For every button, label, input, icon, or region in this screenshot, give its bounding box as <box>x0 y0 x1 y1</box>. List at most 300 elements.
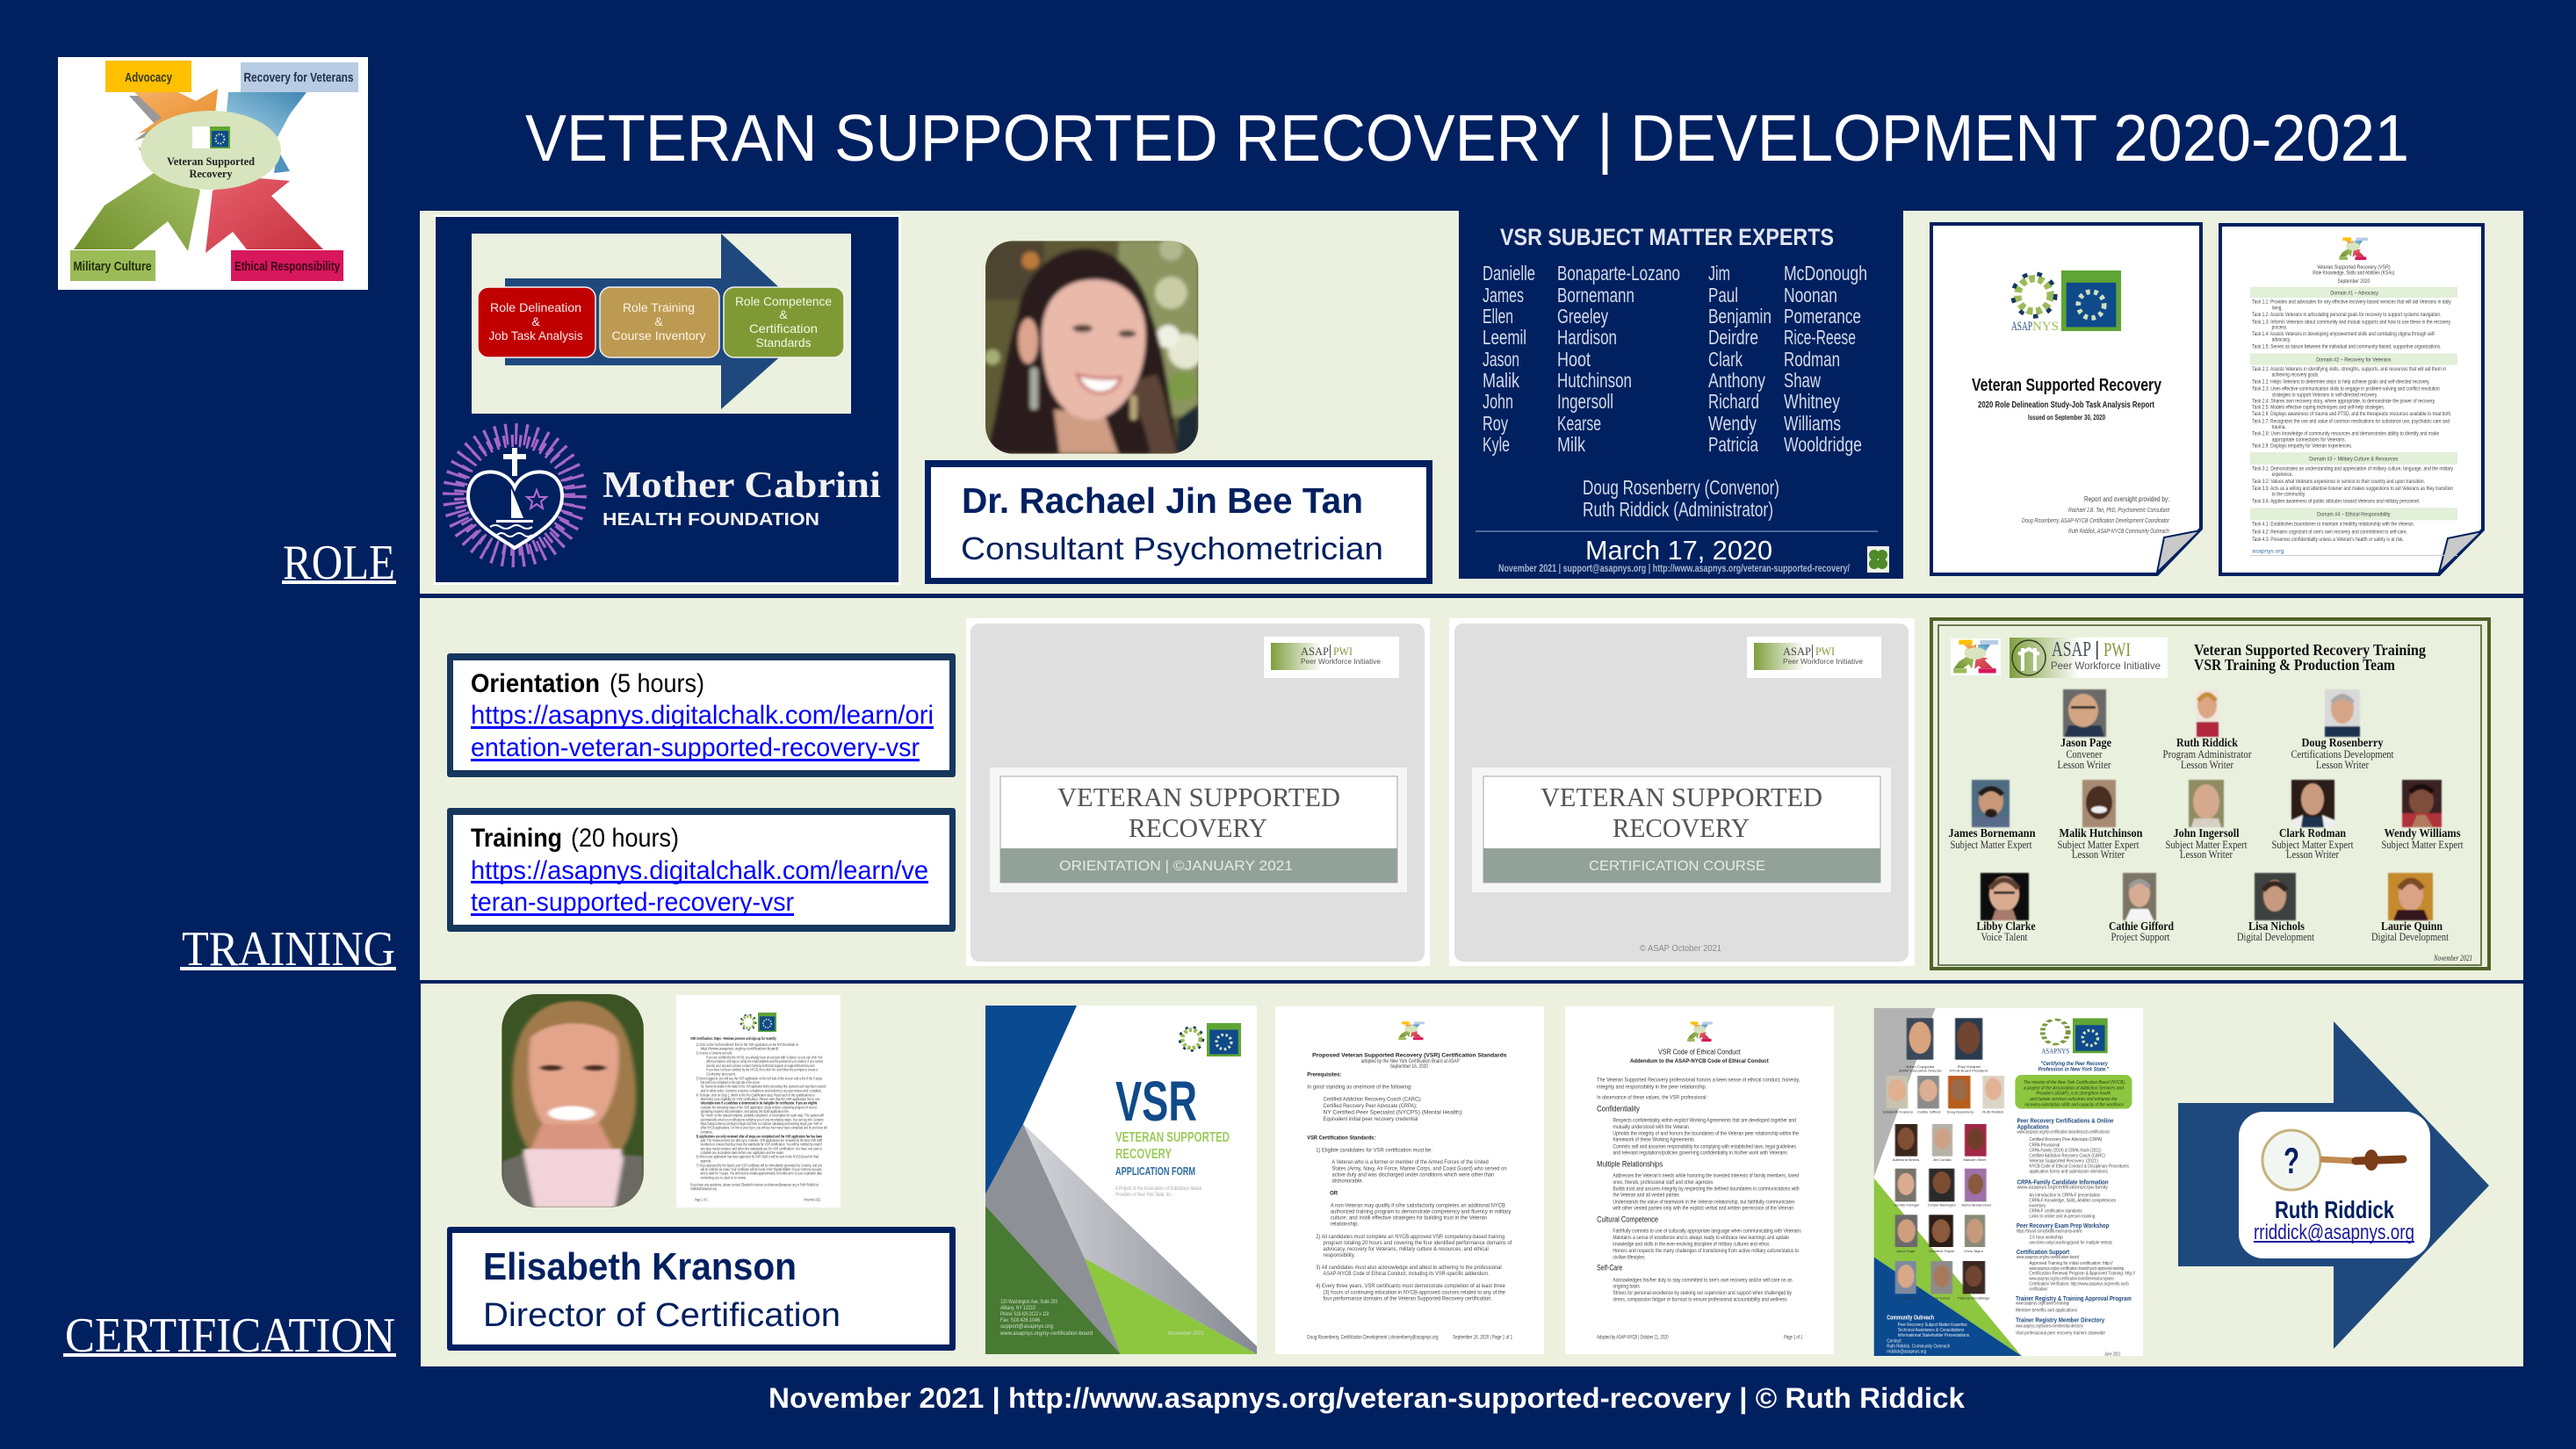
document: NY Certification Board brochure: Doug Rosenberry <box>1947 1111 1973 1114</box>
document: role knowledge, skills and abilities: appropriate connections for Veterans. <box>2272 436 2346 443</box>
team member names and roles: Subject Matter Expert <box>2166 839 2248 851</box>
logo: VSR domains: Military Culture <box>74 259 151 274</box>
slide: training and production team: PWI <box>2103 638 2131 660</box>
document: NY Certification Board brochure: Malcolm Steel <box>1964 1158 1986 1162</box>
document: job task analysis report cover: Issued on September 30, 2020 <box>2028 413 2105 422</box>
document: certification steps: 2) Access a Certemy account: <box>696 1050 732 1056</box>
panel: certification: advocacy, recovery for Veterans, military culture & resources, and ethical <box>1324 1245 1489 1252</box>
document: NY Certification Board brochure: Community Outreach <box>1887 1314 1934 1321</box>
document: job task analysis report cover: Report and oversight provided by: <box>2084 495 2169 503</box>
slide: orientation course title: Peer Workforce Initiative <box>1301 658 1382 666</box>
panel: certification: and relevant regulations/policies governing confidentiality in his/her work with Veterans <box>1613 1150 1787 1156</box>
document: NY Certification Board brochure: 2.5 hour workshop <box>2029 1235 2063 1240</box>
slide: orientation course title: PWI <box>1333 645 1353 658</box>
document: code of ethical conduct: Cultural Competence <box>1597 1215 1658 1224</box>
role process and Mother Cabrini card: Course Inventory <box>611 328 706 342</box>
document: VSR application form cover: VSR <box>1115 1070 1197 1133</box>
link card: orientation <box>447 653 956 777</box>
document: certification steps: reminding you to start or to renew. <box>701 1175 747 1179</box>
document: VSR application form cover: 120 Washington Ave, Suite 203 <box>1000 1300 1058 1305</box>
document: NY Certification Board brochure: Member benefits and applications <box>2016 1308 2077 1313</box>
document: certification standards <box>1275 1006 1544 1354</box>
panel: certification: access your account, please contact Certemy technical support at support@certemy.com <box>706 1063 815 1068</box>
document: NY Certification Board brochure: Links to online and in-person training <box>2029 1214 2095 1219</box>
panel: VSR subject matter experts: Deirdre <box>1708 326 1758 349</box>
panel: VSR subject matter experts: November 2021 | support@asapnys.org | http://www.asapnys.org/veteran-supported-recovery/ <box>1498 562 1850 574</box>
document: NY Certification Board brochure: Applications <box>2017 1123 2049 1130</box>
panel: certification: Acknowledges his/her duty to stay committed to one's own recovery and/or self-care on an <box>1613 1277 1793 1283</box>
title: VETERAN SUPPORTED RECOVERY | DEVELOPMENT 2020-2021 <box>525 101 2409 175</box>
panel: VSR subject matter experts: Noonan <box>1784 284 1837 306</box>
document: certification standards: Certified Recovery Peer Advocate (CRPA); <box>1324 1102 1418 1109</box>
section label: training: TRAINING <box>182 922 395 977</box>
panel: certification: 3) All candidates must also acknowledge and attest to adhering to the professional <box>1316 1264 1502 1271</box>
panel: certification: Certification Renewal Program & Approved Training: http:// <box>2029 1271 2135 1276</box>
document: NY Certification Board brochure: CRPA-Family Candidate Information <box>2017 1179 2109 1186</box>
document: role knowledge, skills and abilities: strategies to support Veterans in self-directed recovery. <box>2272 393 2378 398</box>
panel: VSR subject matter experts: Patricia <box>1708 433 1758 456</box>
team member names and roles: Project Support <box>2111 931 2170 943</box>
panel: VSR subject matter experts: James <box>1483 284 1524 306</box>
document: VSR application form cover: A Project of the Association of Substance Abuse <box>1115 1186 1202 1192</box>
section label: certification: CERTIFICATION <box>65 1308 395 1363</box>
document: job task analysis report cover: Doug Rosenberry, ASAP-NYCB Certification Development Coordinator <box>2022 518 2170 524</box>
document: NY Certification Board brochure: www.asapnys.org/certifications/crpa-family <box>2017 1185 2108 1190</box>
document: NY Certification Board brochure: CRPA-F certification standards <box>2029 1208 2082 1214</box>
panel: certification: Upholds the integrity of and honors the boundaries of the Veteran peer relationship within the <box>1613 1130 1799 1136</box>
team member names and roles <box>1948 737 2472 962</box>
panel: certification: uploading required documentation, and paying the $100 application fee. <box>701 1109 790 1114</box>
panel: certification: Strives for personal excellence by seeking out supervision and support when challenged by <box>1613 1290 1792 1296</box>
panel: certification: States (Army, Navy, Air Force, Marine Corps, and Coast Guard) who served on <box>1331 1165 1507 1171</box>
document: role knowledge, skills and abilities: trauma. <box>2272 424 2286 430</box>
panel: VSR subject matter experts <box>1459 211 1903 579</box>
document: code of ethical conduct: Adopted by ASAP-NYCB | October 21, 2020 <box>1597 1334 1669 1340</box>
role process and Mother Cabrini card: HEALTH FOUNDATION <box>603 510 819 530</box>
document: role knowledge, skills and abilities: experience. <box>2272 472 2293 478</box>
document: certification standards: Doug Rosenberry, Certification Development | drosenberry@asapnys.org <box>1307 1334 1439 1340</box>
document: certification steps: http://www.asapnys.org/ny-certification-board/ <box>701 1046 779 1051</box>
panel: certification: If you have any questions, please contact Elisabeth Kranson at ekranson@asapnys.org or Ruth Riddick at <box>690 1182 819 1186</box>
role process and Mother Cabrini card: & <box>531 314 540 328</box>
team member names and roles: Malik Hutchinson <box>2059 827 2143 840</box>
logo: VSR domains: Ethical Responsibility <box>235 259 340 274</box>
document: role knowledge, skills and abilities: Domain #1 – Advocacy <box>2330 290 2378 296</box>
link card: orientation: entation-veteran-supported-recovery-vsr <box>471 733 920 762</box>
link card: training: https://asapnys.digitalchalk.com/learn/ve <box>471 856 928 885</box>
panel: VSR subject matter experts: Malik <box>1483 369 1519 392</box>
panel: VSR subject matter experts: Hardison <box>1557 326 1617 349</box>
panel: VSR subject matter experts: Whitney <box>1784 390 1840 413</box>
document: code of ethical conduct <box>1565 1006 1834 1354</box>
name card: Rachael Tan <box>925 460 1432 584</box>
link card: training: teran-supported-recovery-vsr <box>471 888 794 917</box>
logo: VSR domains <box>58 57 368 290</box>
panel: VSR subject matter experts: Wendy <box>1708 412 1757 435</box>
footer: November 2021 | http://www.asapnys.org/veteran-supported-recovery | © Ruth Riddick <box>768 1382 1965 1414</box>
photo: Elisabeth Kranson <box>501 994 644 1208</box>
document: NY Certification Board brochure: https://tinyurl.com/y5kdfk.exam-prep-online <box>2017 1229 2082 1234</box>
document: NY Certification Board brochure: An introduction to CRPA-F presentation <box>2029 1193 2100 1198</box>
panel: VSR subject matter experts: McDonough <box>1784 262 1867 285</box>
role process and Mother Cabrini card: Role Delineation <box>490 300 581 314</box>
panel: training <box>420 598 2523 980</box>
team member photos <box>1972 689 2442 920</box>
document: role knowledge, skills and abilities: Domain #3 – Military Culture & Resources <box>2309 457 2399 462</box>
document: certification standards: Prerequisites: <box>1307 1071 1341 1078</box>
panel: certification: with other vested parties only with the explicit verbal and written permission of the Veteran <box>1613 1205 1793 1211</box>
team member names and roles: Lesson Writer <box>2072 848 2125 861</box>
panel: certification: September 16, 2020 | Page 1 of 1 <box>1453 1334 1512 1340</box>
document: NY Certification Board brochure: Ruth Riddick, Community Outreach <box>1887 1344 1950 1349</box>
panel: certification: complete the remaining steps of the VSR application. Steps include completing program of record, <box>701 1105 817 1109</box>
team member names and roles: Digital Development <box>2371 931 2449 943</box>
role process and Mother Cabrini card: Standards <box>755 335 812 350</box>
document: certification steps: Page 1 of 1 <box>695 1197 708 1201</box>
document: certification steps: complete. <box>701 1129 713 1134</box>
name card: Rachael Tan: Dr. Rachael Jin Bee Tan <box>962 480 1363 521</box>
team member names and roles: Lesson Writer <box>2286 848 2340 861</box>
panel: certification: VSR Certification: Steps - Reviews process and sign up for Acentify <box>690 1036 776 1041</box>
panel: certification: Builds trust and assures integrity by respecting the defined boundaries in communications with <box>1613 1186 1800 1192</box>
document: NY Certification Board brochure: Christal Washington <box>1928 1204 1956 1208</box>
document: NY Certification Board brochure: rriddick@asapnys.org <box>1887 1349 1926 1354</box>
document: NY Certification Board brochure: John Coppola <box>1905 1065 1934 1069</box>
document: NY Certification Board brochure: Visit professional peer recovery trainers statewide <box>2016 1330 2105 1336</box>
panel: VSR subject matter experts: Jason <box>1483 348 1519 371</box>
document: certification steps: rriddick@asapnys.org. <box>690 1186 718 1191</box>
name card: Elisabeth Kranson <box>447 1227 956 1351</box>
role process and Mother Cabrini card <box>434 215 901 585</box>
panel: VSR subject matter experts: VSR SUBJECT MATTER EXPERTS <box>1500 224 1834 250</box>
slide: certification course title: © ASAP October 2021 <box>1640 944 1721 954</box>
panel: VSR subject matter experts: Doug Rosenberry (Convenor) <box>1583 476 1779 499</box>
icon: magnifying glass with question mark: ? <box>2284 1140 2299 1181</box>
panel: VSR subject matter experts: Richard <box>1708 390 1759 413</box>
panel: certification: and in what order. Certemy ensures completion and submit to accept review and complete. <box>701 1088 822 1092</box>
team member names and roles: Subject Matter Expert <box>2057 839 2139 851</box>
document: NY Certification Board brochure: Providers (ASAP), is to strengthen health <box>2036 1091 2111 1096</box>
panel: VSR subject matter experts: Kearse <box>1557 412 1601 435</box>
document: VSR application form cover: Providers of New York State, Inc. <box>1115 1193 1173 1198</box>
team member names and roles: Lesson Writer <box>2180 848 2233 861</box>
slide: certification course title: CERTIFICATION COURSE <box>1589 859 1765 874</box>
panel: VSR subject matter experts: Williams <box>1784 412 1841 435</box>
slide: orientation course title: ORIENTATION | ©JANUARY 2021 <box>1059 859 1293 874</box>
team member names and roles: Convener <box>2066 748 2103 761</box>
document: certification standards: dishonorable. <box>1331 1178 1363 1184</box>
role process and Mother Cabrini card: Mother Cabrini <box>603 465 881 506</box>
document: NY Certification Board brochure: Elisabeth Kranson <box>1883 1111 1913 1114</box>
panel: certification: https://asap.certemy.com/sign-in/login and then to continue uploading and working steps your VSR or <box>701 1121 822 1126</box>
document: VSR application form cover: November 2021 <box>1168 1331 1205 1337</box>
panel: certification: 3) Once logged in, you will see the VSR application on the left side of the screen and a list of the 5 steps <box>696 1076 822 1080</box>
document: certification steps: approval. <box>701 1158 711 1163</box>
panel: certification: a project of the Association of Addiction Services and <box>2024 1085 2124 1091</box>
panel: certification: Honors and respects the many challenges of transitioning from active military culture/status to <box>1613 1248 1799 1254</box>
document: VSR application form cover: Albany, NY 12210 <box>1000 1306 1036 1311</box>
document: role knowledge, skills and abilities: living. <box>2272 305 2283 311</box>
document: certification standards: responsibility. <box>1324 1251 1355 1258</box>
slide: certification course title: RECOVERY <box>1613 812 1750 843</box>
document: NY Certification Board brochure: Certification Support <box>2017 1249 2069 1256</box>
panel: certification: four performance domains of the Veteran Supported Recovery certification. <box>1324 1295 1492 1301</box>
panel: VSR subject matter experts: Rodman <box>1784 348 1840 371</box>
document: NY Certification Board brochure: CRPA-Family (2019) & CRPA-Youth (2021) <box>2029 1148 2102 1153</box>
document: job task analysis report cover: Ruth Riddick, ASAP-NYCB Community Outreach <box>2068 529 2169 535</box>
panel: certification: automatically email you notifications notifying you of any incomplete steps. You can log into Certemy <box>701 1117 824 1121</box>
team member names and roles: Digital Development <box>2237 931 2314 943</box>
document: NY Certification Board brochure: Charlene Payne <box>1929 1250 1954 1253</box>
team member names and roles: Ruth Riddick <box>2176 737 2238 750</box>
document: code of ethical conduct: mutually understood with the Veteran <box>1613 1124 1689 1130</box>
panel: certification: and human services outcomes and enhance the <box>2030 1096 2118 1102</box>
document: certification standards: September 16, 2020 <box>1390 1063 1428 1070</box>
panel: VSR subject matter experts: Leemil <box>1483 326 1526 349</box>
link card: orientation: (5 hours) <box>610 669 704 698</box>
document: NY Certification Board brochure: Ruth Riddick <box>1982 1111 2004 1114</box>
document: NY Certification Board brochure: Peer Recovery Exam Prep Workshop <box>2017 1222 2109 1229</box>
panel: certification: Understands the value of teamwork in the Veteran relationship, but faithfully communicates <box>1613 1199 1795 1205</box>
slide: training and production team: ASAP <box>2052 638 2091 661</box>
document: certification standards: NY Certified Peer Specialist (NYCPS) (Mental Health); <box>1324 1109 1463 1115</box>
document: NY Certification Board brochure: Trainer Registry Member Directory <box>2016 1316 2104 1323</box>
panel: VSR subject matter experts: Rice-Reese <box>1784 326 1856 349</box>
slide: certification course title: Peer Workforce Initiative <box>1783 658 1864 666</box>
team member names and roles: Subject Matter Expert <box>1950 839 2032 851</box>
document: VSR application form cover: Phone: 518.426.3122 x 119 <box>1000 1312 1049 1317</box>
document: NY Certification Board brochure: ASAP Executive Director <box>1899 1070 1942 1073</box>
panel: VSR subject matter experts: Anthony <box>1708 369 1765 392</box>
document: NY Certification Board brochure: www.asapnys.org/trainers-membership-directory/ <box>2016 1323 2083 1329</box>
panel: certification: active duty and was discharged under conditions which were other than <box>1331 1171 1494 1178</box>
document: NY Certification Board brochure: one-time-only/coaching/good for multiple retests <box>2029 1240 2112 1245</box>
panel: VSR subject matter experts: Hutchinson <box>1557 369 1632 392</box>
document: NY Certification Board brochure: www.asapnys.org/ny-certification-board <box>2016 1254 2079 1259</box>
panel: certification: recovery-orientation skills and capacity of the workforce <box>2024 1102 2124 1107</box>
role process and Mother Cabrini card: & <box>654 314 663 328</box>
document: code of ethical conduct: Addendum to the ASAP-NYCB Code of Ethical Conduct <box>1630 1058 1769 1064</box>
slide: orientation course title: ASAP <box>1301 645 1329 658</box>
panel: certification: 4) To begin, click on Step 1, which is the Pre-Qualification step. Read each of the qualifications to <box>696 1092 815 1097</box>
panel: certification: 2) All candidates must complete an NYCB-approved VSR competency-based training <box>1316 1233 1504 1240</box>
panel: VSR subject matter experts: Danielle <box>1483 262 1535 285</box>
document: NY Certification Board brochure: ASAPNYS <box>2041 1047 2069 1056</box>
document: role knowledge, skills and abilities: achieving recovery goals. <box>2272 372 2319 378</box>
document: NY Certification Board brochure: Veteran Supported Recovery (2021) <box>2029 1158 2098 1164</box>
document: code of ethical conduct: civilian lifestyles <box>1613 1254 1645 1260</box>
team member names and roles: Laurie Quinn <box>2381 920 2443 934</box>
logo: VSR domains: Veteran Supported <box>167 155 256 168</box>
icon: magnifying glass with question mark <box>2262 1130 2403 1190</box>
document: NY Certification Board brochure: application forms and submission directions <box>2029 1169 2108 1174</box>
document: NY Certification Board brochure: Roy Kearse <box>1958 1065 1981 1069</box>
panel: VSR subject matter experts: Bornemann <box>1557 284 1634 306</box>
document: NY Certification Board brochure: Certified Addiction Recovery Coach (CARC) <box>2029 1153 2105 1158</box>
logo: VSR domains: Recovery <box>190 167 233 180</box>
document: NY Certification Board brochure: Contact: <box>1887 1338 1902 1344</box>
document: VSR application form cover: APPLICATION FORM <box>1115 1164 1195 1178</box>
document: code of ethical conduct: ones, friends, professional staff and other agencies <box>1613 1179 1714 1186</box>
document: NY Certification Board brochure: inventory <box>2029 1203 2046 1208</box>
panel: certification: Peer Recovery Certifications & Online <box>2017 1117 2113 1124</box>
panel: certification: 5) Applications are only reviewed after all steps are completed and the VSR application fee has been <box>696 1134 822 1138</box>
arrow: contact Ruth Riddick: rriddick@asapnys.org <box>2254 1221 2414 1244</box>
panel: VSR subject matter experts: Jim <box>1708 262 1730 285</box>
role process and Mother Cabrini card: & <box>779 307 788 321</box>
document: NY Certification Board brochure: Adrienne Brevis <box>1893 1158 1920 1162</box>
document: NY Certification Board brochure: Jennifer Faringer <box>1894 1204 1920 1208</box>
panel: VSR subject matter experts: Pomerance <box>1784 305 1861 328</box>
document: certification standards: VSR Certification Standards: <box>1307 1135 1375 1141</box>
panel: VSR subject matter experts: Shaw <box>1784 369 1821 392</box>
document: VSR application form cover <box>985 1006 1257 1354</box>
document: role knowledge, skills and abilities: Task 2.9: Displays empathy for Veteran experiences. <box>2252 443 2352 449</box>
document: certification standards: Certified Addiction Recovery Coach (CARC); <box>1324 1096 1421 1102</box>
document: code of ethical conduct: Confidentiality <box>1597 1105 1640 1114</box>
panel: certification: (3) hours of continuing education in NYCB-approved courses related to any of the <box>1324 1289 1505 1295</box>
document: NY Certification Board brochure: Keith Stack <box>1899 1296 1916 1301</box>
document: code of ethical conduct: Multiple Relationships <box>1597 1160 1663 1169</box>
document: certification standards: adopted by the New York Certification Board at ASAP <box>1361 1057 1460 1064</box>
panel: certification: Commits self and assumes responsibility for complying with established laws, legal guidelines <box>1613 1143 1796 1150</box>
panel: certification: determine your eligibility for VSR certification. Please note that the VSR application fee is non- <box>701 1097 820 1101</box>
document: NY Certification Board brochure: Profession in New York State." <box>2038 1066 2110 1072</box>
document: job task analysis report cover: ASAP <box>2011 320 2032 334</box>
panel: certification: 7) Once approved by the board, your VSR certificate will be immediately generated by Certemy, and you <box>696 1163 822 1167</box>
panel: certification: A Veteran who is a former or member of the Armed Forces of the United <box>1331 1158 1489 1165</box>
document: code of ethical conduct: Page 1 of 1 <box>1784 1334 1802 1340</box>
panel: certification: 1) Click on the 'Self-enrollment' link for the VSR application on the NYCB website at <box>696 1042 798 1047</box>
link card: training: Training <box>471 824 562 853</box>
slide: training and production team: VSR Training & Production Team <box>2194 656 2395 674</box>
panel: certification: knowledge and skills in the ever-evolving discipline of military cultures and ethos <box>1613 1241 1770 1247</box>
panel: certification: The mission of the New York Certification Board (NYCB), <box>2024 1079 2125 1085</box>
document: certification steps: November 2021 <box>804 1197 820 1201</box>
panel: certification: will be notified via email. Your certificate will be found in the 'Digital Wallet' of your Certemy account, <box>700 1167 822 1171</box>
panel: certification: Proposed Veteran Supported Recovery (VSR) Certification Standards <box>1312 1052 1507 1058</box>
document: role knowledge, skills and abilities: Domain #2 – Recovery for Veterans <box>2316 357 2392 363</box>
panel: certification: Respects confidentiality within explicit Working Agreements that are developed together and <box>1613 1117 1796 1123</box>
document: role knowledge, skills and abilities: asapnys.org <box>2252 548 2284 554</box>
name card: Rachael Tan: Consultant Psychometrician <box>961 530 1383 566</box>
panel: certification: Tip: 'Work' on the status/complete, partially completed, or incomplete for each step. The system will <box>701 1113 824 1118</box>
name card: Elisabeth Kranson: Elisabeth Kranson <box>483 1245 797 1288</box>
document: NY Certification Board brochure: Peer Recovery Subject Matter Expertise <box>1898 1322 1967 1328</box>
panel: certification: complete any incomplete steps before your application and fee expire. <box>701 1150 784 1155</box>
panel: certification: Trainer Registry & Training Approval Program <box>2016 1295 2132 1302</box>
document: NY Certification Board brochure: Informational Stakeholder Presentations <box>1898 1332 1969 1338</box>
logo: VSR domains: Recovery for Veterans <box>244 70 353 85</box>
team member names and roles: Subject Matter Expert <box>2382 839 2464 851</box>
panel: VSR subject matter experts: Ruth Riddick (Administrator) <box>1583 498 1773 521</box>
team member names and roles: Lesson Writer <box>2316 759 2370 771</box>
panel: certification: Certification Verification: http://www.asapnys.org/verify-nycb <box>2029 1281 2129 1287</box>
panel: certification: www.asapnys.org/ny-certification-board/renewal-programs <box>2029 1276 2114 1281</box>
document: NY Certification Board brochure: CRPA-Provisional <box>2029 1143 2060 1148</box>
panel: VSR subject matter experts: John <box>1483 390 1513 413</box>
panel: certification: program totaling 20 hours and covering the four identified performance domains of <box>1324 1239 1512 1246</box>
document: NY Certification Board brochure: www.asapnys.org/trainers-training/ <box>2016 1301 2069 1306</box>
document: NY Certification Board brochure: Certified Recovery Peer Advocate (CRPA) <box>2029 1136 2102 1142</box>
slide: orientation course title <box>966 618 1430 966</box>
document: VSR application form cover: www.asapnys.org/ny-certification-board <box>999 1331 1093 1337</box>
team member names and roles: Doug Rosenberry <box>2301 737 2384 750</box>
document: certification standards: In good standing as one/more of the following: <box>1307 1084 1412 1090</box>
panel: certification: NYCB Code of Ethical Conduct & Disciplinary Procedures <box>2029 1164 2129 1169</box>
slide: training and production team: Veteran Supported Recovery Training <box>2194 641 2426 659</box>
role process and Mother Cabrini card: Role Competence <box>735 294 832 308</box>
role process and Mother Cabrini card: Certification <box>749 321 818 335</box>
panel: certification: and is valid for 3 years. You will receive emails approximately 6 months prior to your expiration date <box>701 1171 822 1176</box>
team member names and roles: Certifications Development <box>2291 748 2394 761</box>
team member names and roles: Libby Clarke <box>1976 920 2036 934</box>
document: NY Certification Board brochure: Approved Training for initial certification: http:// <box>2029 1260 2113 1265</box>
document: code of ethical conduct: VSR Code of Ethical Conduct <box>1658 1048 1741 1056</box>
panel: certification: members to ensure that they meet the standards for VSR certification. You will be notified by email if <box>701 1142 822 1147</box>
team member names and roles: James Bornemann <box>1948 827 2036 840</box>
document: job task analysis report cover: 2020 Role Delineation Study-Job Task Analysis Report <box>1978 400 2154 410</box>
document: NY Certification Board brochure: Technical Assistance & Consultations <box>1898 1327 1964 1333</box>
document: role knowledge, skills and abilities: process. <box>2272 325 2287 330</box>
document: NY Certification Board brochure: "Certifying the Peer Recovery <box>2040 1061 2108 1067</box>
team member names and roles: Clark Rodman <box>2279 827 2346 840</box>
document: code of ethical conduct: framework of these Working Agreements <box>1613 1136 1694 1143</box>
document: VSR application form cover: RECOVERY <box>1115 1147 1172 1162</box>
document: NY Certification Board brochure: Cathie Gifford <box>1917 1111 1940 1114</box>
panel: certification: paid. The review process can take up to 3 weeks. VSR applications are reviewed by the New VSR Staff <box>701 1138 822 1143</box>
panel: certification: If you are certified by the NYCB, you already have an account with Certemy; so you can click 'Yes' <box>706 1055 823 1059</box>
document: certification standards: OR <box>1330 1190 1338 1196</box>
document: job task analysis report cover: Veteran Supported Recovery <box>1972 376 2162 395</box>
document: code of ethical conduct: the Veteran and all vested parties <box>1613 1192 1679 1198</box>
document: NY Certification Board brochure: NYCB Board President <box>1950 1070 1988 1073</box>
panel: VSR subject matter experts: Milk <box>1557 433 1585 456</box>
document: code of ethical conduct: Self-Care <box>1597 1264 1622 1272</box>
slide: certification course title <box>1449 618 1915 966</box>
panel: VSR subject matter experts: Greeley <box>1557 305 1608 328</box>
slide: orientation course title: RECOVERY <box>1129 812 1267 843</box>
section label: role: ROLE <box>283 536 395 590</box>
document: role knowledge, skills and abilities: Domain #4 – Ethical Responsibility <box>2317 511 2391 517</box>
document: NY Certification Board brochure: Aisha Muhammad <box>1961 1204 1991 1208</box>
document: code of ethical conduct: integrity and responsibility in the peer relationship. <box>1597 1084 1707 1090</box>
panel: VSR subject matter experts: March 17, 2020 <box>1585 535 1772 566</box>
document: certification steps: Certemy account. <box>706 1071 736 1076</box>
panel: VSR subject matter experts: Ingersoll <box>1557 390 1613 413</box>
panel: certification: authorized training program to demonstrate competency and fluency in military <box>1331 1208 1512 1215</box>
panel: VSR subject matter experts: Kyle <box>1483 433 1510 456</box>
document: NY Certification Board brochure: June 2021 <box>2104 1352 2120 1357</box>
link card: orientation: Orientation <box>471 669 600 698</box>
document: VSR application form cover: support@asapnys.org <box>1000 1324 1053 1330</box>
team member names and roles: Lesson Writer <box>2181 759 2234 771</box>
panel: certification: culture; and instill effective strategies for building trust in the Veteran <box>1331 1215 1487 1221</box>
document: NY Certification Board brochure <box>1874 1008 2143 1357</box>
document: NY Certification Board brochure: CRPA-F Knowledge, Skills, Abilities competencies <box>2029 1198 2117 1203</box>
role process and Mother Cabrini card: Role Training <box>623 300 695 314</box>
panel: certification: Addresses the Veteran's needs while honoring the invested interests of family members, loved <box>1613 1172 1799 1179</box>
team member names and roles: Lesson Writer <box>2057 759 2111 771</box>
link card: orientation: https://asapnys.digitalchalk.com/learn/ori <box>471 701 934 730</box>
panel: role <box>420 211 2523 594</box>
document: NY Certification Board brochure: Patricia Wooldridge <box>1958 1296 1989 1301</box>
logo: VSR domains: Advocacy <box>125 70 172 85</box>
team member names and roles: Wendy Williams <box>2384 827 2461 840</box>
document: certification standards: 1) Eligible candidates for VSR certification must be: <box>1316 1147 1432 1153</box>
slide: orientation course title: VETERAN SUPPORTED <box>1057 782 1340 812</box>
document: job task analysis report cover: Rachael J.B. Tan, PhD, Psychometric Consultant <box>2068 508 2170 514</box>
